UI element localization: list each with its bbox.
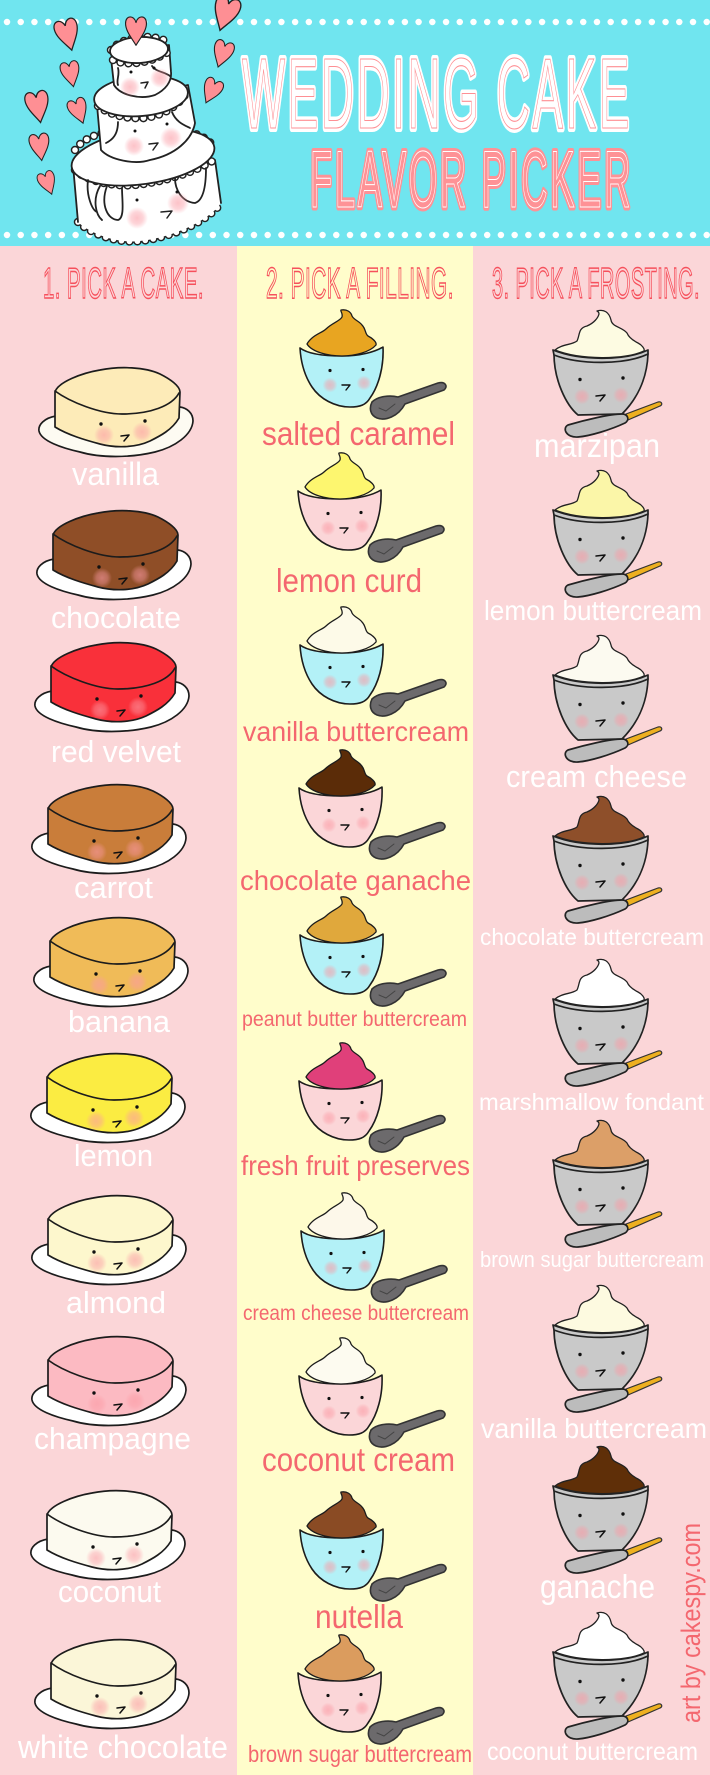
filling: fresh fruit preserves xyxy=(241,1043,470,1181)
frosting: coconut buttercream xyxy=(487,1612,698,1766)
filling: coconut cream: coconut cream xyxy=(262,1441,455,1478)
cake: almond xyxy=(32,1196,186,1320)
frosting: ganache xyxy=(540,1446,662,1605)
frosting: lemon buttercream xyxy=(484,470,702,626)
cake: almond: almond xyxy=(66,1285,166,1320)
filling: cream cheese buttercream: cream cheese buttercream xyxy=(243,1302,469,1325)
frosting: marzipan: marzipan xyxy=(534,427,660,464)
cake: vanilla xyxy=(39,368,193,492)
middle tier xyxy=(92,72,195,162)
frosting: cream cheese: cream cheese xyxy=(506,759,687,794)
cake: chocolate: chocolate xyxy=(51,600,181,635)
background: yellow filling column xyxy=(237,246,473,1775)
top tier xyxy=(109,36,171,97)
cake: white chocolate xyxy=(17,1640,228,1765)
cake: carrot: carrot xyxy=(74,870,153,905)
frosting: ganache: ganache xyxy=(540,1568,655,1605)
cake: carrot xyxy=(32,785,186,905)
cake: lemon xyxy=(31,1054,185,1173)
filling: nutella xyxy=(300,1492,446,1635)
filling: chocolate ganache: chocolate ganache xyxy=(240,865,471,896)
frosting: marshmallow fondant: marshmallow fondant xyxy=(479,1089,705,1115)
filling: vanilla buttercream xyxy=(243,607,469,747)
bottom tier xyxy=(68,120,221,241)
filling: chocolate ganache xyxy=(240,750,471,896)
filling: coconut cream xyxy=(262,1338,455,1478)
filling: vanilla buttercream: vanilla buttercream xyxy=(243,716,469,747)
cake: coconut: coconut xyxy=(58,1574,161,1609)
panel: cakes xyxy=(17,368,228,1765)
credit: art by cakespy.com: art by cakespy.com xyxy=(676,1523,706,1723)
frosting: vanilla buttercream xyxy=(481,1285,707,1444)
text: 1. PICK A CAKE. xyxy=(43,259,204,308)
cake: chocolate xyxy=(37,511,191,635)
cake: banana xyxy=(34,918,188,1039)
heart on cake top xyxy=(126,17,146,45)
cake: red velvet: red velvet xyxy=(51,734,181,769)
cake: coconut xyxy=(31,1491,185,1609)
frosting: marzipan xyxy=(534,310,662,464)
cake: vanilla: vanilla xyxy=(72,456,159,492)
frosting: brown sugar buttercream xyxy=(480,1120,704,1272)
filling: brown sugar buttercream xyxy=(248,1635,472,1767)
cake: white chocolate: white chocolate xyxy=(17,1729,228,1765)
cake: red velvet xyxy=(35,643,189,769)
filling: lemon curd xyxy=(276,453,444,599)
frosting: chocolate buttercream xyxy=(480,796,704,950)
frosting: cream cheese xyxy=(506,635,687,794)
filling: brown sugar buttercream: brown sugar buttercream xyxy=(248,1741,472,1767)
filling: lemon curd: lemon curd xyxy=(276,562,422,599)
cake: champagne xyxy=(32,1337,191,1456)
cake: banana: banana xyxy=(68,1004,171,1039)
text: 2. PICK A FILLING. xyxy=(266,259,454,308)
cake: lemon: lemon xyxy=(74,1138,153,1173)
frosting: chocolate buttercream: chocolate buttercream xyxy=(480,924,704,950)
filling: salted caramel xyxy=(262,310,455,452)
hearts xyxy=(24,0,243,197)
background: pink frosting column xyxy=(473,246,710,1775)
panel: frostings xyxy=(479,310,707,1766)
panel: fillings xyxy=(240,310,472,1767)
background: pink cake column xyxy=(0,246,237,1775)
header banner xyxy=(0,0,710,246)
filling: nutella: nutella xyxy=(315,1598,404,1635)
frosting: coconut buttercream: coconut buttercream xyxy=(487,1738,698,1766)
illustration: three-tier wedding cake xyxy=(68,17,221,241)
frosting: marshmallow fondant xyxy=(479,959,705,1115)
filling: peanut butter buttercream: peanut butter buttercream xyxy=(242,1008,467,1031)
filling: cream cheese buttercream xyxy=(243,1193,469,1325)
filling: fresh fruit preserves: fresh fruit preserves xyxy=(241,1150,470,1181)
filling: peanut butter buttercream xyxy=(242,897,467,1031)
cake: champagne: champagne xyxy=(34,1421,191,1456)
filling: salted caramel: salted caramel xyxy=(262,415,455,452)
